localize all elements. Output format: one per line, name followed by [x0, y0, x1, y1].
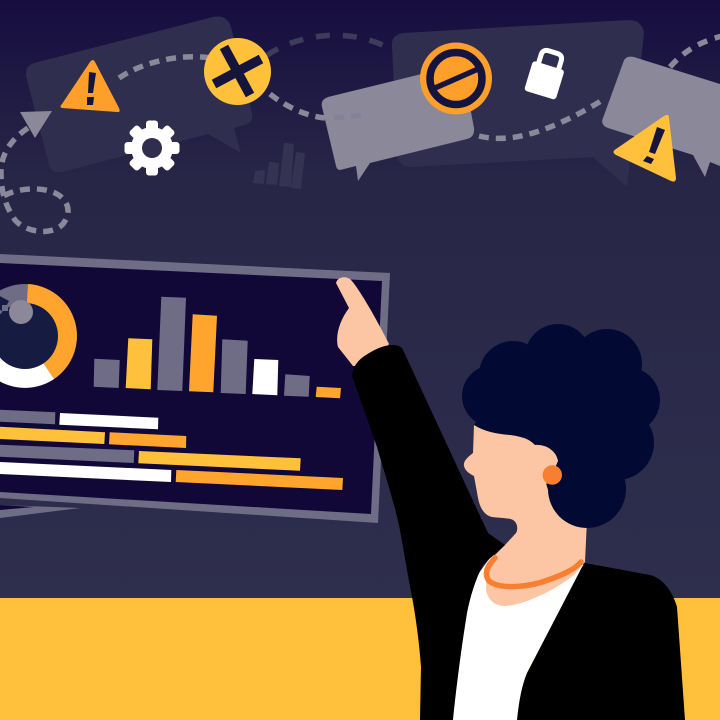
- speech bubble: dark left: [26, 16, 252, 172]
- ear: [535, 445, 558, 484]
- speech bubble: grey right: [602, 57, 720, 177]
- person: [336, 277, 685, 720]
- speech bubble: dark centre: [392, 20, 644, 187]
- hand: pointing finger: [336, 277, 389, 366]
- donut chart: [0, 284, 77, 388]
- earring: [543, 465, 562, 485]
- bar chart: screen columns: [94, 297, 341, 398]
- dashed path: top right: [670, 36, 720, 67]
- monitor frame: [0, 254, 390, 523]
- icon: white padlock: [524, 47, 569, 100]
- dashed path: cross to grey bubble: [270, 94, 325, 118]
- necklace: [487, 558, 581, 587]
- white shirt: [440, 555, 584, 720]
- bar chart: faint background: [253, 143, 305, 189]
- hair: [462, 324, 660, 528]
- bar rows: horizontal bars: [0, 410, 343, 490]
- speech bubble: grey left: [322, 64, 474, 181]
- jacket: raised arm and left panel: [352, 345, 505, 720]
- dashed path: cross to bubble faint: [266, 35, 392, 56]
- jacket: right panel: [517, 563, 685, 720]
- icon: yellow warning triangle: [614, 115, 676, 182]
- monitor screen: [0, 263, 382, 514]
- icon: white gear: [124, 120, 180, 176]
- arrow head: grey triangle: [20, 111, 52, 138]
- icon: yellow cross circle: [204, 38, 271, 105]
- dashed path: left loop: [0, 128, 68, 231]
- skin: face and neck: [464, 425, 587, 606]
- icon: orange warning triangle: [60, 60, 120, 112]
- monitor back sliver: [0, 505, 80, 518]
- icon: orange prohibited circle: [420, 42, 492, 114]
- dashed path: faint over grey bubble: [334, 115, 362, 118]
- dashed path: centre bubble curve: [479, 101, 601, 138]
- yellow floor band: [0, 598, 720, 720]
- dashed path: warning to cross: [119, 57, 212, 78]
